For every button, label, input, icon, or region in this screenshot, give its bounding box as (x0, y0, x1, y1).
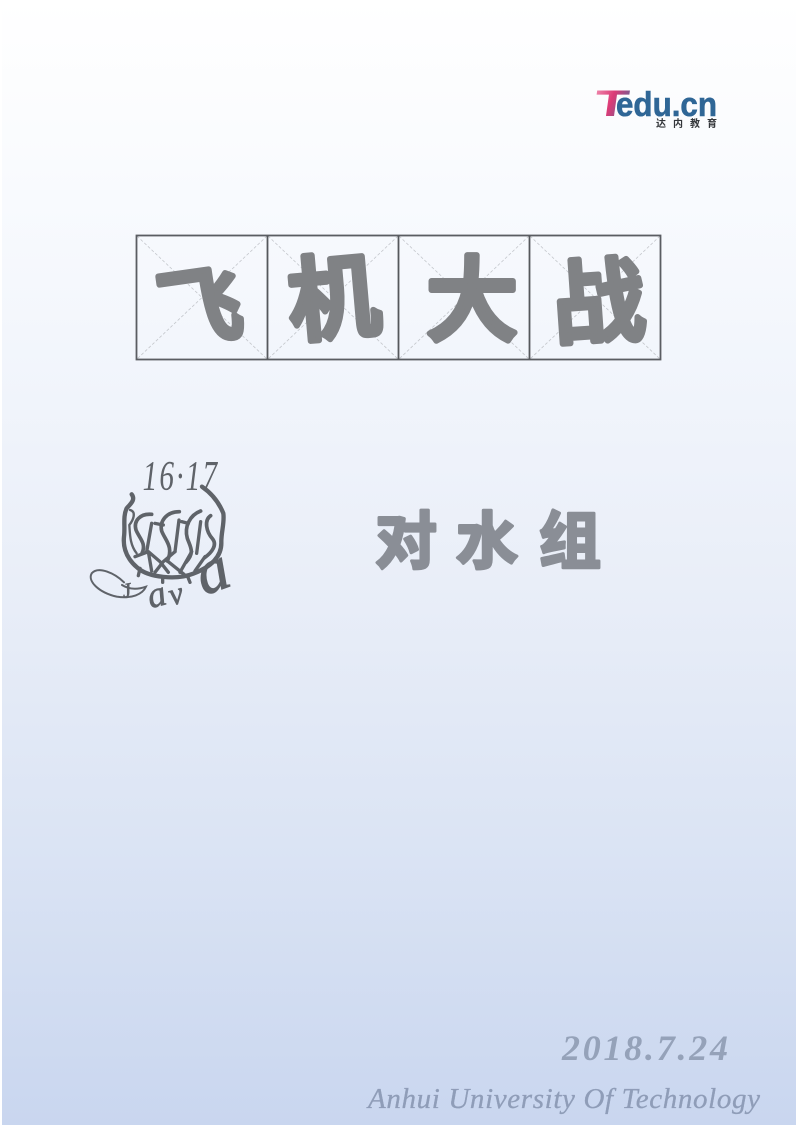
logo: Tedu.cn (592, 82, 717, 130)
title text: 飞机大战: 机 (284, 245, 385, 355)
university name: Anhui University Of Technology (366, 1083, 760, 1115)
group name: 对水组 (375, 508, 601, 577)
emblem Java text (91, 532, 239, 616)
group name: 对水组: 对 (375, 508, 437, 577)
logo: Tedu.cn: 达内教育 (656, 117, 717, 130)
group name: 对水组: 水 (456, 508, 518, 577)
emblem year text: 16·17 (143, 452, 218, 499)
emblem: 16·17 Java jar (91, 452, 239, 616)
logo: Tedu.cn: T (592, 82, 632, 124)
emblem Java text: a (142, 572, 170, 616)
title text: 飞机大战: 飞 (152, 256, 248, 361)
logo: Tedu.cn: edu.cn (616, 86, 717, 124)
title text: 飞机大战 (152, 245, 648, 361)
title grid: four character boxes (136, 236, 660, 360)
title text: 飞机大战: 战 (549, 250, 648, 358)
group name: 对水组: 组 (539, 508, 601, 577)
emblem jar drawing (124, 487, 224, 582)
emblem Java text: J (120, 579, 134, 603)
title text: 飞机大战: 大 (426, 251, 518, 353)
emblem Java text: a (185, 532, 239, 609)
date: 2018.7.24 (561, 1028, 728, 1068)
emblem Java text: v (164, 575, 188, 612)
